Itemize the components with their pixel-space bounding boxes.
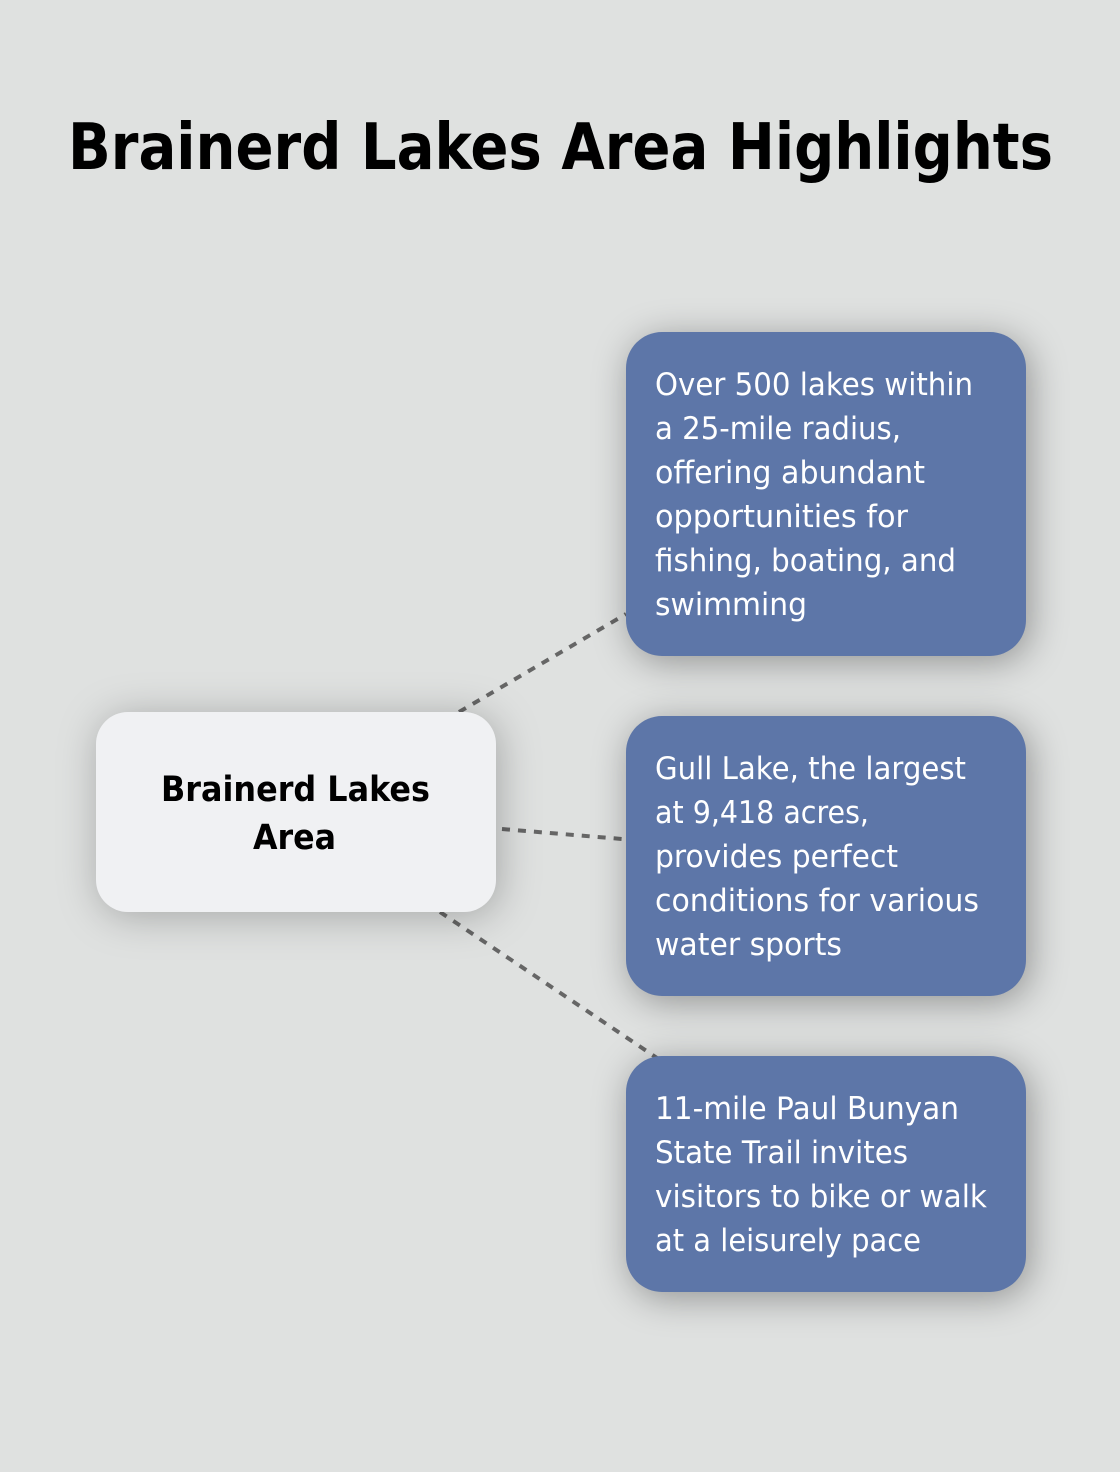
Gull Lake card text: water sports <box>655 927 842 963</box>
trail card text: 11-mile Paul Bunyan <box>655 1091 959 1127</box>
trail card text: at a leisurely pace <box>655 1223 921 1259</box>
lakes card text: swimming <box>655 587 807 623</box>
lakes card text <box>655 367 973 623</box>
Gull Lake card text: at 9,418 acres, <box>655 795 869 831</box>
lakes card text: Over 500 lakes within <box>655 367 973 403</box>
panel: Gull Lake card <box>626 716 1026 996</box>
centre node label: Area <box>253 818 336 858</box>
lakes card text: fishing, boating, and <box>655 543 956 579</box>
trail card text <box>655 1091 987 1259</box>
panel: trail card <box>626 1056 1026 1292</box>
Gull Lake card text: Gull Lake, the largest <box>655 751 966 787</box>
Gull Lake card text: conditions for various <box>655 883 979 919</box>
connector: centre to Gull Lake card <box>502 829 622 839</box>
panel: centre node <box>96 712 496 912</box>
lakes card text: a 25-mile radius, <box>655 411 901 447</box>
trail card text: State Trail invites <box>655 1135 908 1171</box>
lakes card text: offering abundant <box>655 455 925 491</box>
centre node label: Brainerd Lakes <box>161 770 430 810</box>
panel: lakes card <box>626 332 1026 656</box>
connector: centre to trail card <box>440 912 657 1058</box>
Gull Lake card text <box>655 751 979 963</box>
centre node label <box>161 770 430 858</box>
lakes card text: opportunities for <box>655 499 908 535</box>
Gull Lake card text: provides perfect <box>655 839 898 875</box>
trail card text: visitors to bike or walk <box>655 1179 987 1215</box>
connector: centre to lakes card <box>459 614 626 712</box>
